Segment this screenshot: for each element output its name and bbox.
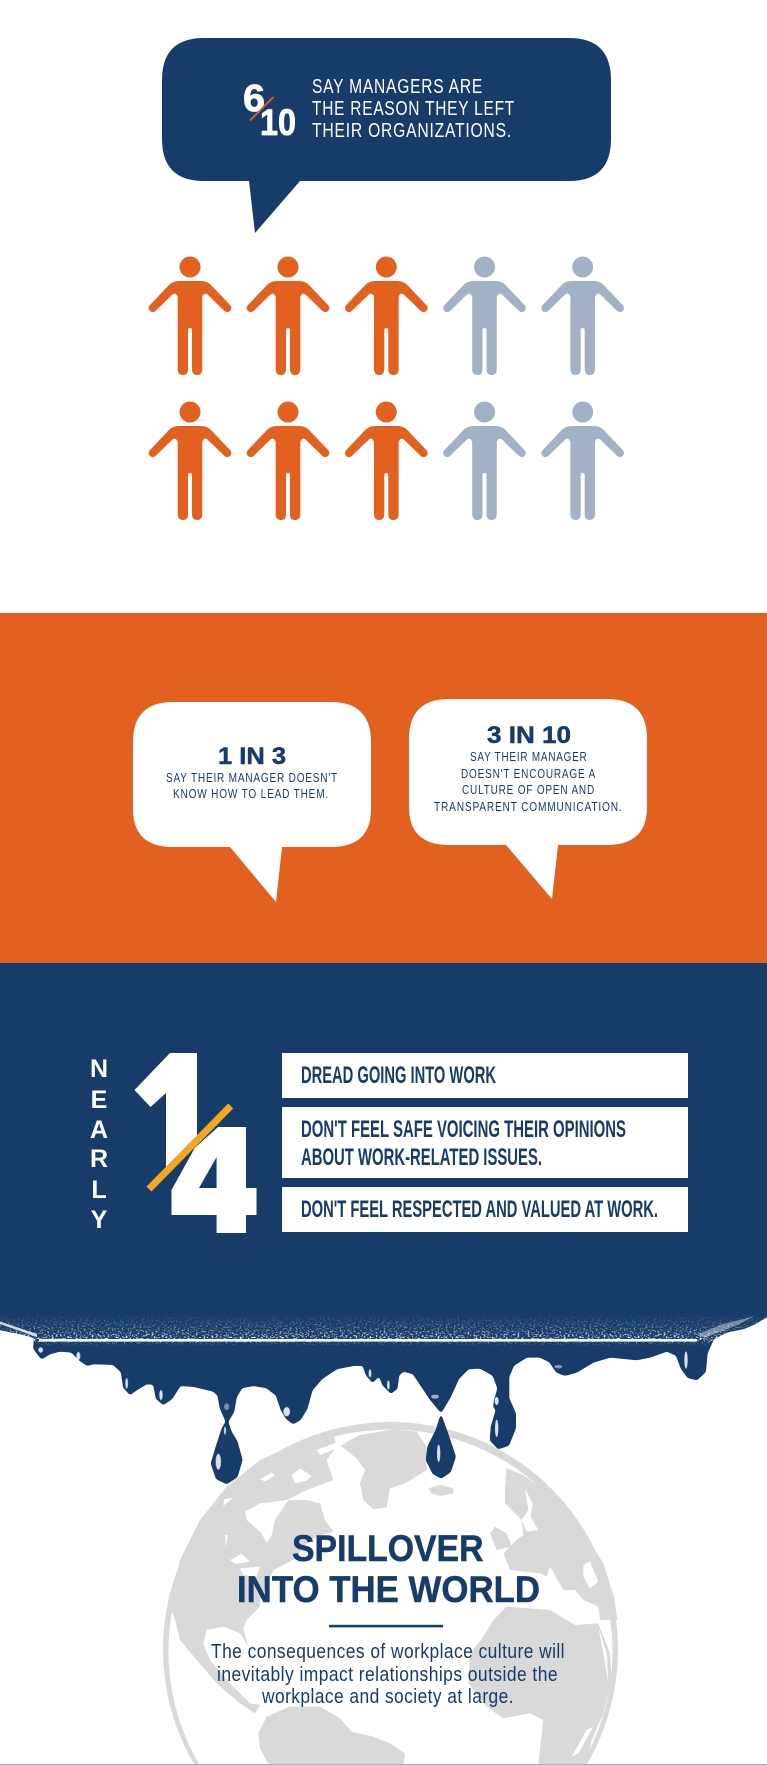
Europe	[503, 1468, 617, 1620]
statement: don't feel safe	[282, 1107, 688, 1178]
vertical label: nearly: A	[90, 1116, 108, 1144]
callout: 3 in 10: 3 IN 10	[487, 722, 571, 749]
callout: 1 in 3	[133, 702, 371, 902]
Greenland	[340, 1429, 427, 1509]
panel: six in ten speech bubble	[162, 38, 611, 233]
callout: 3 in 10: SAY THEIR MANAGER	[470, 750, 588, 764]
vertical label: nearly: R	[90, 1145, 108, 1173]
callout: 1 in 3: 1 IN 3	[218, 743, 286, 770]
callout: 3 in 10	[409, 699, 647, 899]
vertical label: nearly: E	[91, 1086, 107, 1114]
globe ring	[163, 1422, 618, 1764]
vertical label: nearly: N	[90, 1055, 108, 1083]
speckled edge	[0, 1314, 767, 1346]
text block: consequences: inevitably impact relationships outside the	[217, 1664, 558, 1686]
Africa	[468, 1607, 612, 1764]
bubble text: SAY MANAGERS ARE	[312, 76, 483, 98]
statement: dread going into work	[282, 1053, 688, 1098]
panel: nearly one in four	[90, 1053, 688, 1234]
pictogram: ten people, six highlighted	[149, 256, 624, 520]
icon: people row two	[149, 402, 624, 520]
bubble shape	[162, 38, 611, 233]
British Isles	[490, 1527, 512, 1550]
panel: navy band with dripping paint	[0, 963, 767, 1483]
callout: 3 in 10: DOESN'T ENCOURAGE A	[461, 767, 596, 781]
statement: dread going into work: DREAD GOING INTO WORK	[301, 1062, 496, 1089]
callout: 3 in 10: CULTURE OF OPEN AND	[462, 783, 595, 797]
text block: consequences: The consequences of workplace culture will	[211, 1641, 565, 1663]
vertical label: nearly	[90, 1055, 108, 1234]
bubble text: THEIR ORGANIZATIONS.	[312, 120, 512, 142]
land masses	[169, 1429, 617, 1764]
callout: 1 in 3: KNOW HOW TO LEAD THEM.	[173, 787, 329, 801]
South America	[258, 1707, 405, 1764]
North and Central America	[169, 1433, 337, 1713]
icon: people row one	[149, 256, 624, 375]
text block: consequences: workplace and society at large.	[261, 1686, 514, 1708]
vertical label: nearly: L	[91, 1176, 107, 1204]
globe illustration	[163, 1422, 618, 1764]
panel: orange band	[0, 613, 767, 964]
stat: 6/10: 6	[243, 78, 265, 120]
heading: spillover into the world: INTO THE WORLD	[237, 1569, 540, 1610]
fraction: one quarter	[134, 1053, 256, 1233]
statement: don't feel respected	[282, 1187, 688, 1232]
bubble text	[312, 76, 515, 142]
heading: spillover into the world	[237, 1528, 540, 1610]
paint drips	[0, 1300, 767, 1483]
white paint edge line	[39, 1339, 697, 1342]
vertical label: nearly: Y	[91, 1206, 108, 1234]
statement: don't feel safe: ABOUT WORK-RELATED ISSUES.	[301, 1144, 542, 1171]
drip highlights	[38, 1347, 688, 1470]
text block: consequences	[211, 1641, 565, 1708]
corner streaks	[0, 1316, 755, 1338]
callout: 1 in 3: SAY THEIR MANAGER DOESN'T	[166, 771, 338, 785]
Iceland	[428, 1485, 453, 1496]
stat: 6/10	[243, 78, 296, 143]
lakes, inland seas and channels	[223, 1433, 608, 1757]
callout: 3 in 10: TRANSPARENT COMMUNICATION.	[434, 800, 622, 814]
heading: spillover into the world: SPILLOVER	[292, 1528, 484, 1569]
stat: 6/10: 10	[260, 102, 296, 143]
bubble text: THE REASON THEY LEFT	[312, 98, 515, 120]
